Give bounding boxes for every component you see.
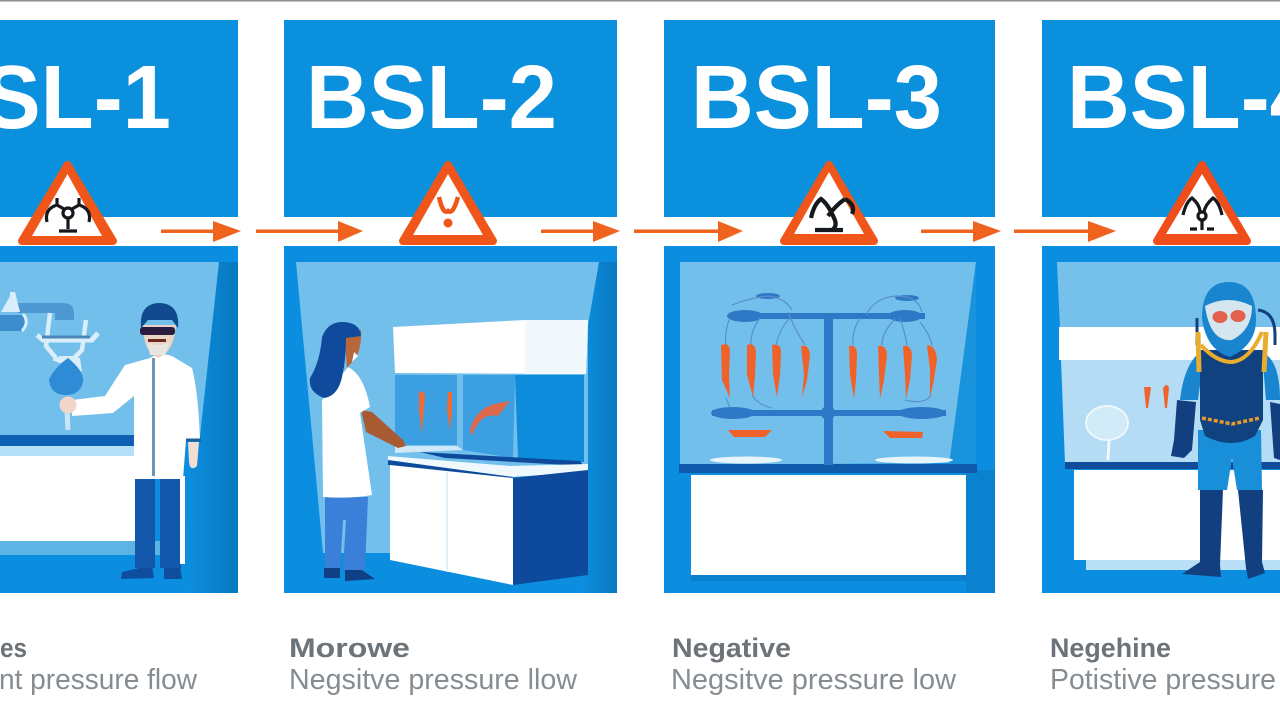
caption BSL-2 xyxy=(289,633,577,696)
panel: BSL-4 xyxy=(1042,20,1280,593)
caption BSL-1: es xyxy=(0,633,27,663)
biosafety cabinet xyxy=(388,320,588,585)
BSL-2 header: BSL-2 xyxy=(306,48,557,148)
orange droplets xyxy=(721,344,937,438)
caption BSL-1: nt pressure flow xyxy=(0,664,197,696)
flask and samples xyxy=(1086,385,1169,460)
caption BSL-4 xyxy=(1050,633,1276,696)
BSL-2 header xyxy=(284,20,617,217)
biohazard symbol xyxy=(46,198,90,231)
arrow 2 xyxy=(256,221,363,242)
BSL-3 header: BSL-3 xyxy=(691,48,942,148)
arrow 6 xyxy=(1014,221,1116,242)
airflow manifold xyxy=(711,293,946,465)
arrow 5 xyxy=(921,221,1001,242)
BSL-4 lab scene xyxy=(1042,246,1280,593)
BSL-3 lab scene xyxy=(664,246,995,593)
caption BSL-3 xyxy=(671,633,956,696)
caption BSL-1 xyxy=(0,633,197,696)
caption BSL-3: Negative xyxy=(672,633,791,663)
scientist in lab coat xyxy=(60,303,201,579)
panel: BSL-2 xyxy=(284,20,617,593)
panel: BSL-3 xyxy=(664,20,995,593)
BSL-3 header xyxy=(664,20,995,217)
caption BSL-3: Negsitve pressure low xyxy=(671,664,956,696)
scientist with long hair xyxy=(310,322,406,581)
BSL-1 lab scene xyxy=(0,246,238,593)
caption BSL-4: Negehine xyxy=(1050,633,1171,663)
arrow 1 xyxy=(161,221,241,242)
panel: BSL-1 xyxy=(0,20,238,593)
researcher in positive pressure suit xyxy=(1171,282,1280,579)
BSL-2 lab scene xyxy=(284,246,617,593)
BSL-4 header xyxy=(1042,20,1280,217)
warning triangle BSL-2 xyxy=(403,165,493,241)
biohazard symbol xyxy=(1183,198,1222,230)
warning triangle BSL-3 xyxy=(784,165,874,241)
warning triangle BSL-1 xyxy=(22,165,113,241)
biohazard symbol xyxy=(811,199,853,230)
cabinet samples xyxy=(419,392,510,436)
warning triangle BSL-4 xyxy=(1157,165,1247,241)
BSL-1 header xyxy=(0,20,238,217)
airflow curves xyxy=(726,296,932,408)
caption BSL-4: Potistive pressure xyxy=(1050,664,1276,696)
arrow 3 xyxy=(541,221,620,242)
caption BSL-2: Morowe xyxy=(289,633,410,663)
glassware apparatus xyxy=(0,292,98,430)
exclamation-like mark xyxy=(439,197,458,228)
caption BSL-2: Negsitve pressure llow xyxy=(289,664,577,696)
arrow 4 xyxy=(634,221,743,242)
